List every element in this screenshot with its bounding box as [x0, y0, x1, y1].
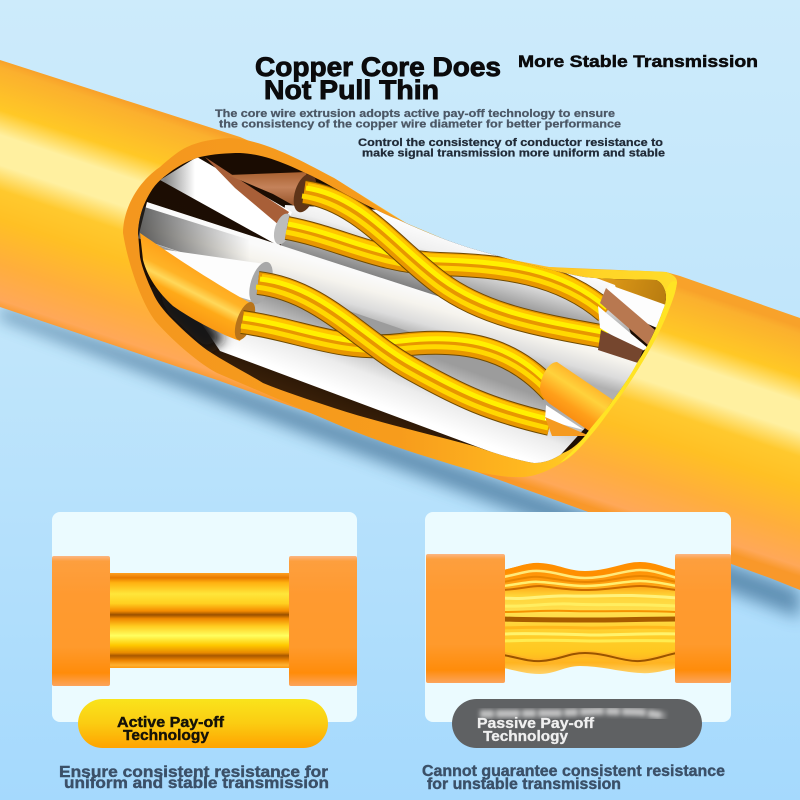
card [52, 512, 357, 722]
cutaway rim [123, 138, 677, 477]
panel: passive pay-off [422, 512, 731, 793]
text block: conductor resistance [358, 137, 665, 160]
right tube whites [600, 285, 666, 328]
caption: Ensure consistent resistance for [59, 764, 328, 781]
text block: conductor resistance: Control the consistency of conductor resistance to [358, 137, 663, 149]
cable body [0, 60, 800, 590]
label pill [78, 699, 328, 748]
lower white tube area [156, 244, 585, 463]
right connector block [675, 554, 731, 683]
center band shading [138, 206, 244, 260]
heading: copper core: Not Pull Thin [264, 75, 439, 105]
pill label [477, 716, 594, 745]
smudge on pill [480, 711, 665, 716]
heading: copper core [255, 52, 501, 105]
left connector block [52, 556, 110, 686]
text block: core wire extrusion: The core wire extrusion adopts active pay-off technology to ensure [215, 108, 615, 120]
card [425, 512, 731, 722]
interior top right glow [589, 278, 666, 310]
white tube top left [160, 157, 292, 246]
caption: Cannot guarantee consistent resistance [422, 763, 725, 780]
heading: copper core: Copper Core Does [255, 52, 501, 82]
lower left dark shading [150, 285, 225, 352]
caption [422, 763, 725, 793]
right brown tube lower [598, 330, 643, 363]
caption: for unstable transmission [427, 776, 621, 793]
text block: core wire extrusion [215, 108, 621, 130]
right orange tube end [540, 362, 613, 433]
brown tube top [228, 172, 307, 208]
wavy copper wires [505, 562, 675, 674]
caption: uniform and stable transmission [64, 775, 329, 792]
center white band [138, 202, 641, 402]
bottom right white and orange tube [545, 405, 584, 430]
copper wires [231, 171, 666, 436]
panel: active pay-off [52, 512, 357, 792]
pill label [117, 715, 224, 744]
pill label: Technology [483, 729, 568, 745]
cable illustration [0, 60, 800, 590]
tube end ring lower orange [234, 302, 256, 340]
right brown stripe [600, 288, 655, 345]
wire: lower front [256, 276, 554, 428]
white tube behind upper wires [280, 205, 631, 348]
pill label: Active Pay-off [117, 715, 224, 731]
label pill [452, 699, 702, 748]
text block: conductor resistance: make signal transmission more uniform and stable [362, 148, 665, 160]
brown wedge tube [205, 157, 289, 226]
right connector block [289, 556, 357, 686]
caption [59, 764, 329, 792]
pill label: Technology [123, 728, 209, 744]
heading: more stable transmission: More Stable Transmission [518, 53, 758, 71]
orange tube left [140, 233, 254, 341]
pill label: Passive Pay-off [477, 716, 594, 732]
uniform copper wires [106, 573, 292, 668]
wire: lower back [241, 314, 554, 396]
cable interior [138, 153, 666, 463]
white tube lower left [164, 250, 262, 300]
tube end ring brown [294, 174, 316, 212]
cable shadow [0, 307, 800, 618]
wire: upper front [302, 185, 610, 341]
cable near wall lip [560, 281, 677, 463]
text block: core wire extrusion: the consistency of the copper wire diameter for better performance [219, 118, 621, 130]
wire: upper back [286, 220, 608, 316]
tube end ring upper [274, 214, 291, 244]
tube end ring lower grey [249, 262, 273, 304]
left connector block [426, 554, 505, 683]
